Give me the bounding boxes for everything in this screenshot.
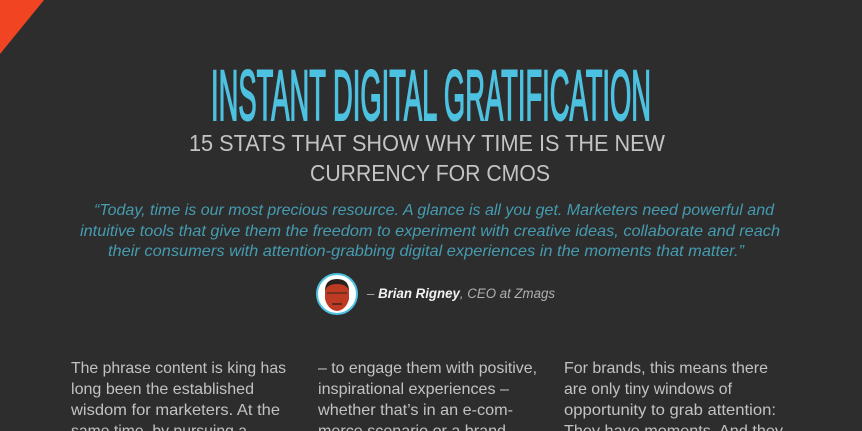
attribution: – Brian Rigney, CEO at Zmags: [366, 286, 555, 301]
icon: portrait of Brian Rigney: [317, 274, 357, 314]
body column 2: whether that’s in an e-com-: [317, 402, 513, 419]
body column 1: wisdom for marketers. At the: [70, 402, 280, 419]
quote: “Today, time is our most precious resource. A glance is all you get. Marketers need powerful and: [94, 202, 775, 219]
body column 2: – to engage them with positive,: [318, 360, 537, 377]
subtitle: CURRENCY FOR CMOS: [310, 160, 550, 186]
quote: their consumers with attention-grabbing digital experiences in the moments that matter.”: [108, 243, 745, 260]
body column 2: [317, 360, 537, 431]
subtitle: [189, 130, 665, 186]
body column 1: [70, 360, 286, 431]
quote: intuitive tools that give them the freedom to experiment with creative ideas, collaborate and reach: [80, 223, 780, 240]
body column 3: [564, 360, 783, 431]
body column 3: opportunity to grab attention:: [564, 402, 776, 419]
quote: [80, 202, 780, 260]
body column 3: are only tiny windows of: [564, 381, 733, 398]
corner triangle: [0, 0, 44, 54]
body column 1: long been the established: [71, 381, 254, 398]
body column 2: inspirational experiences –: [318, 381, 509, 398]
subtitle: 15 STATS THAT SHOW WHY TIME IS THE NEW: [189, 130, 665, 156]
body column 3: For brands, this means there: [564, 360, 768, 377]
body column 1: The phrase content is king has: [71, 360, 286, 377]
